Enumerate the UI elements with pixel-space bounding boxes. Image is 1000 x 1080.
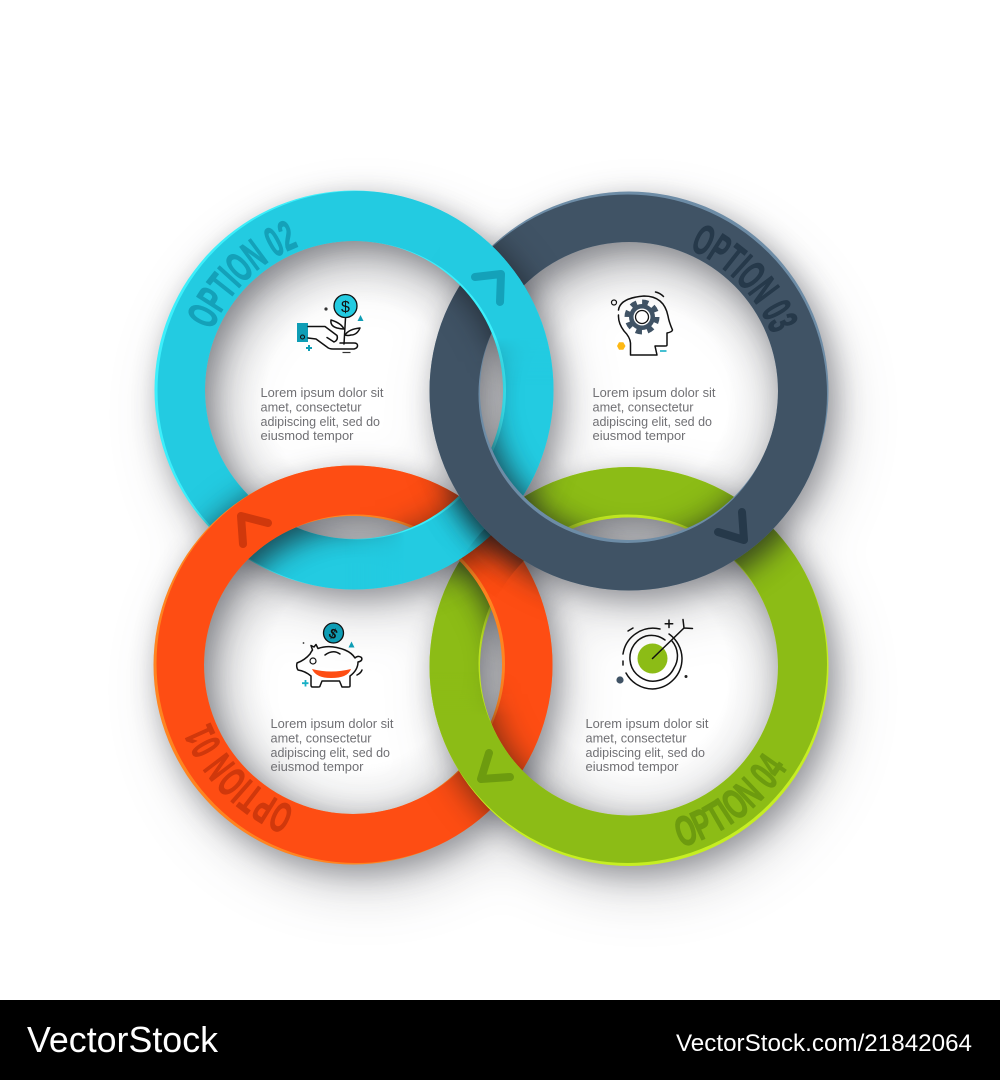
footer logo text: VectorStock (27, 1019, 219, 1060)
icon: hand with money plant: $ (341, 299, 350, 316)
footer band (0, 1000, 1000, 1080)
text block: option 01: Lorem ipsum dolor sit (270, 716, 394, 731)
text block: option 04: amet, consectetur (586, 730, 687, 746)
orange shadow on green ring (448, 560, 524, 818)
cyan shadow on dark crossing (450, 233, 536, 359)
label: option 03: OPTION 03 (693, 226, 798, 332)
ring: dark slate option 03 (453, 217, 803, 568)
dark shadow on orange ring (422, 478, 542, 602)
text block: option 02: amet, consectetur (260, 400, 362, 414)
text block: option 03: adipiscing elit, sed do (592, 414, 712, 429)
arrow: orange ring (241, 516, 268, 544)
text block: option 02: Lorem ipsum dolor sit (260, 385, 384, 400)
inner shading of the four circles (203, 240, 779, 816)
cyan shadow on orange crossing (383, 486, 508, 584)
cyan ring segment over orange (359, 460, 541, 590)
text block: option 04: Lorem ipsum dolor sit (586, 716, 709, 731)
orange shadow on cyan ring (196, 482, 410, 574)
text block: option 03: eiusmod tempor (592, 428, 686, 443)
label: option 04: OPTION 04 (675, 753, 786, 846)
arrow: green ring (481, 753, 510, 779)
dark shadow on green ring (469, 486, 790, 584)
text block: option 01: amet, consectetur (270, 730, 372, 746)
footer url text: VectorStock.com/21842064 (676, 1030, 972, 1057)
text block: option 01: eiusmod tempor (270, 759, 364, 774)
arrow: cyan ring (475, 274, 501, 302)
icon: head with gear (612, 292, 672, 355)
text block: option 04: eiusmod tempor (586, 759, 679, 774)
label: option 02: OPTION 02 (188, 220, 298, 326)
wide soft shadow under rings (179, 216, 803, 841)
icon: piggy bank: $ (326, 625, 340, 642)
icon: hand with money plant (297, 294, 364, 352)
ring: green option 04 (453, 489, 803, 841)
dark shadow on cyan ring (440, 334, 535, 550)
text block: option 02: adipiscing elit, sed do (260, 414, 380, 429)
text block: option 04: adipiscing elit, sed do (586, 745, 705, 760)
green ring segment over orange (430, 683, 580, 860)
arrow: dark ring (718, 512, 744, 540)
text block: option 03: Lorem ipsum dolor sit (592, 385, 716, 400)
ring: cyan option 02 (180, 216, 531, 565)
text block: option 01: adipiscing elit, sed do (270, 745, 390, 760)
label: option 01: OPTION 01 (185, 722, 292, 832)
text block: option 02: eiusmod tempor (260, 428, 354, 443)
green shadow on orange crossing (439, 686, 535, 827)
icon: piggy bank (297, 623, 362, 687)
text block: option 03: amet, consectetur (592, 400, 694, 414)
cyan ring segment over dark (440, 210, 553, 375)
ring: orange option 01 (179, 489, 530, 839)
icon: target with arrow (616, 620, 692, 689)
